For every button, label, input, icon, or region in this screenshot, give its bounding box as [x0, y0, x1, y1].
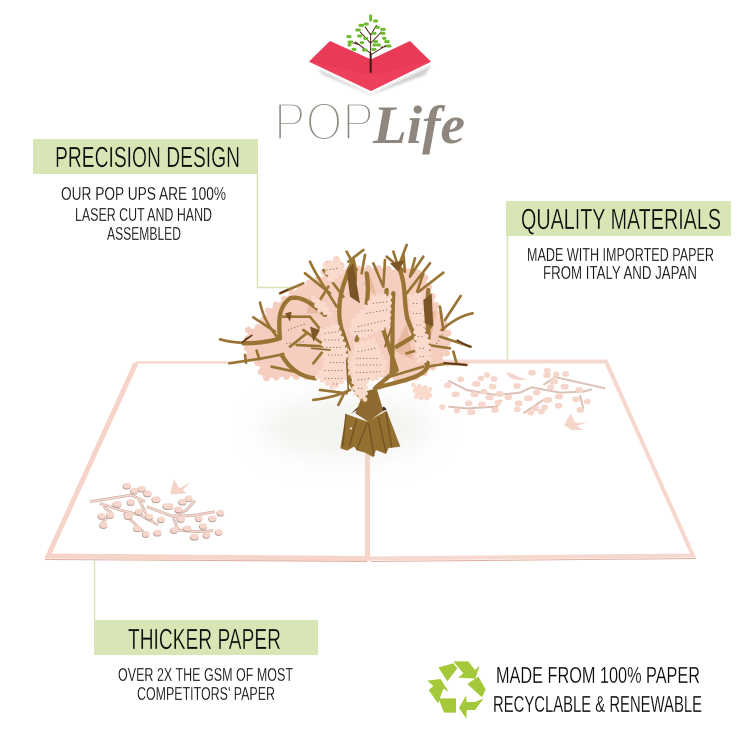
blossom clusters — [287, 258, 443, 400]
text: precision description: ASSEMBLED — [107, 223, 181, 244]
pop-up card — [45, 245, 696, 562]
icon: logo tree — [348, 16, 390, 73]
text: precision description: LASER CUT AND HAND — [75, 204, 212, 225]
pop-up cherry tree — [220, 245, 473, 457]
text: thicker paper description — [118, 664, 293, 704]
heading bar: thicker paper — [94, 620, 318, 655]
text: quality description — [527, 244, 714, 283]
branches — [220, 245, 473, 405]
icon: recycling symbol — [427, 661, 486, 719]
text: thicker paper description: COMPETITORS' PAPER — [137, 683, 275, 704]
card right page — [370, 362, 693, 558]
text: thicker paper description: OVER 2X THE GSM OF MOST — [118, 664, 293, 685]
heading: thicker paper: THICKER PAPER — [128, 624, 281, 656]
heading bar: precision design — [33, 139, 258, 174]
heading: precision design: PRECISION DESIGN — [55, 142, 240, 174]
heading bar: quality materials — [506, 201, 731, 236]
logo wordmark POP: POP — [274, 92, 374, 152]
left page blossom cut-out — [90, 479, 221, 537]
front branches — [312, 327, 392, 390]
tree shadow — [260, 398, 430, 458]
panel: precision design — [33, 139, 292, 288]
card left page — [48, 363, 368, 558]
text: recycling statement — [493, 662, 702, 717]
back shadow details in foliage — [307, 273, 437, 360]
tree base — [340, 388, 400, 457]
dark branch accents — [242, 260, 433, 343]
panel: quality materials — [506, 201, 731, 360]
panel: thicker paper — [94, 560, 318, 704]
text: precision description: OUR POP UPS ARE 100% — [61, 183, 226, 204]
right page blossom cut-out — [442, 371, 605, 430]
logo wordmark Life: Life — [372, 95, 465, 155]
pink foliage backdrop — [247, 258, 448, 380]
text: precision description — [61, 183, 226, 244]
icon: red open book — [309, 41, 432, 95]
logo: Pop Life — [274, 16, 465, 155]
